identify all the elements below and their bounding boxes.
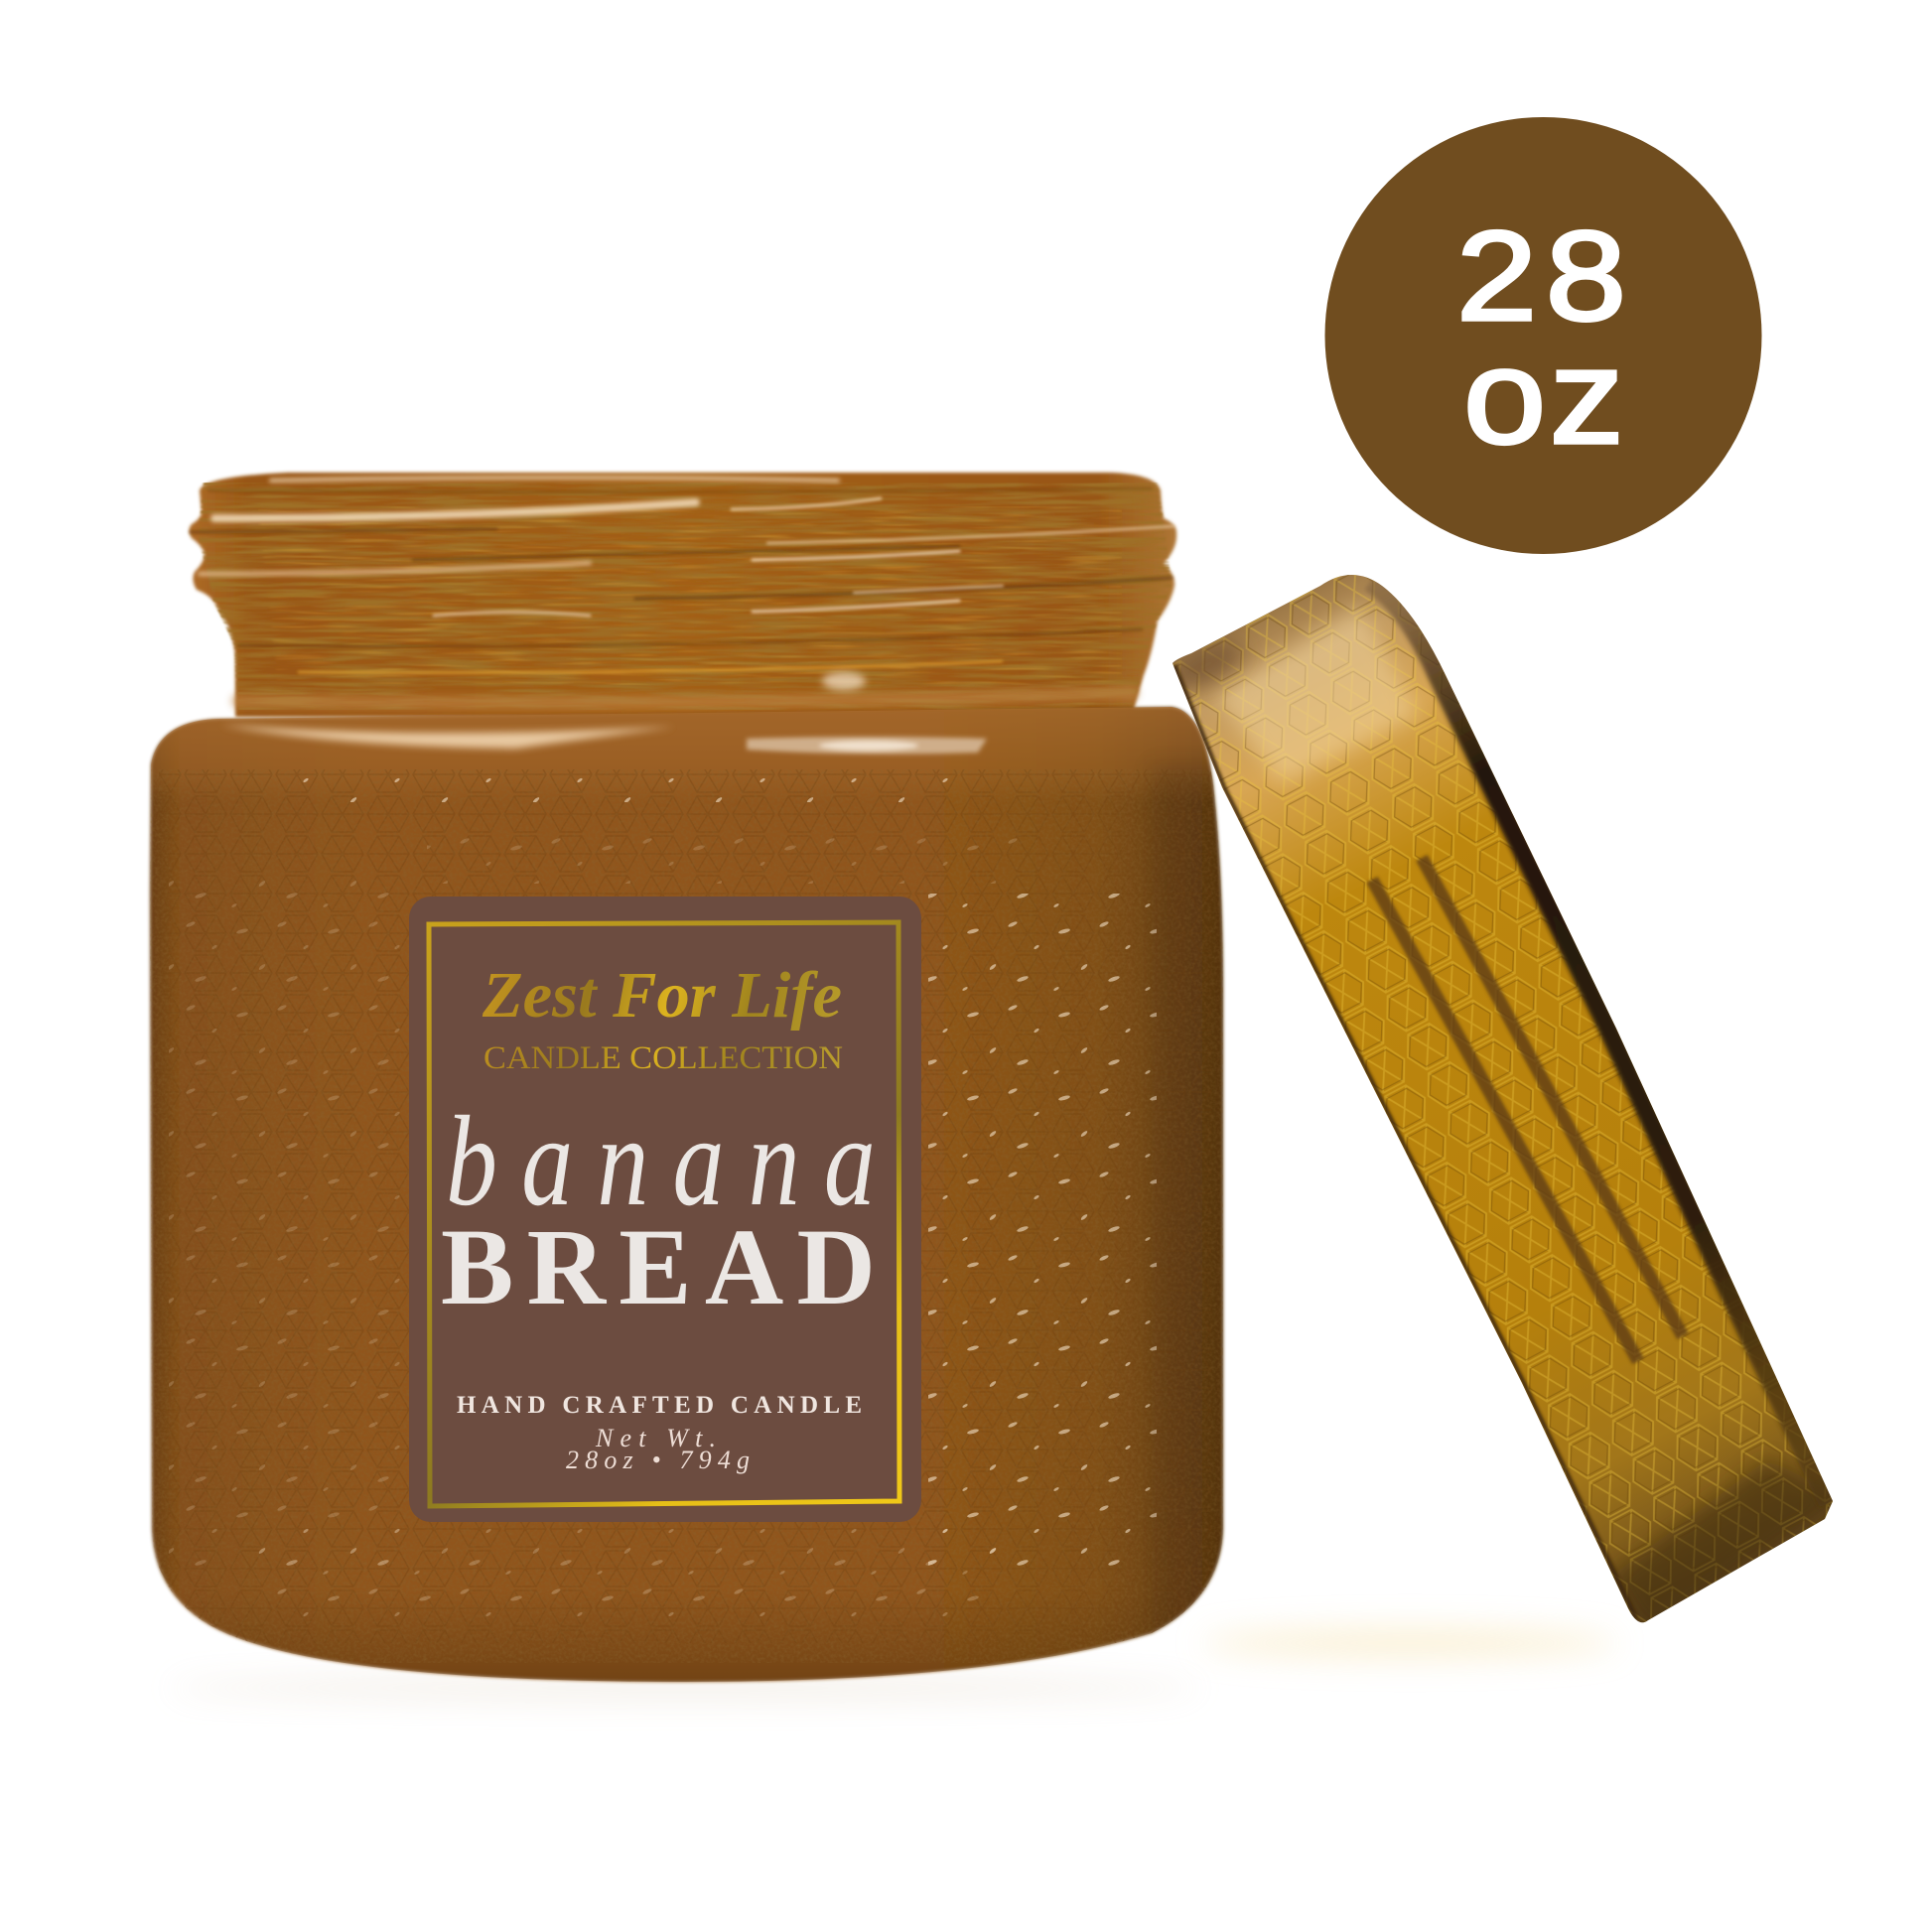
embossed lattice xyxy=(159,769,1211,1643)
lid bottom shading xyxy=(1611,1452,1833,1622)
label card xyxy=(409,897,921,1522)
lid embossed pattern xyxy=(1162,561,1847,1633)
speckled reflections top xyxy=(303,778,948,802)
lid dark corner xyxy=(1173,635,1251,699)
size number: 28 xyxy=(1456,206,1626,347)
lid dark rim xyxy=(1370,582,1829,1503)
speckled reflections left xyxy=(169,874,407,1569)
jar lid xyxy=(1162,561,1847,1638)
hand crafted line: HAND CRAFTED CANDLE xyxy=(457,1392,862,1419)
jar body xyxy=(139,705,1241,1688)
grain texture xyxy=(139,769,1231,1663)
collection line: CANDLE COLLECTION xyxy=(483,1040,843,1076)
shoulder highlight left xyxy=(220,725,675,749)
badge circle xyxy=(1324,117,1761,554)
right side darkening xyxy=(1146,761,1223,1631)
product label xyxy=(409,897,921,1522)
glass shading xyxy=(139,705,1231,1688)
shoulder highlight right xyxy=(747,737,987,754)
brand name: Zest For Life xyxy=(482,959,842,1032)
scent name: bread: BREAD xyxy=(441,1206,876,1327)
product infographic xyxy=(147,117,1833,1704)
wick mark left xyxy=(1372,880,1638,1361)
wick mark right xyxy=(1422,858,1683,1336)
lid top glare xyxy=(1216,606,1420,784)
floor shadow xyxy=(169,1629,1618,1698)
neck glare spot xyxy=(822,672,866,690)
neck thread highlights xyxy=(191,478,1173,703)
gold foil frame xyxy=(429,922,899,1506)
net weight label: Net Wt. xyxy=(595,1424,716,1452)
net weight value: 28oz • 794g xyxy=(566,1446,750,1474)
speckled reflections bottom xyxy=(258,1529,997,1616)
speckled reflections right xyxy=(928,894,1157,1569)
size badge xyxy=(1324,117,1761,554)
jar xyxy=(139,473,1241,1688)
scent name: banana: banana xyxy=(446,1090,876,1233)
lid lower edge xyxy=(1174,665,1636,1618)
size unit: oz xyxy=(1463,322,1624,472)
jar neck xyxy=(189,473,1176,717)
